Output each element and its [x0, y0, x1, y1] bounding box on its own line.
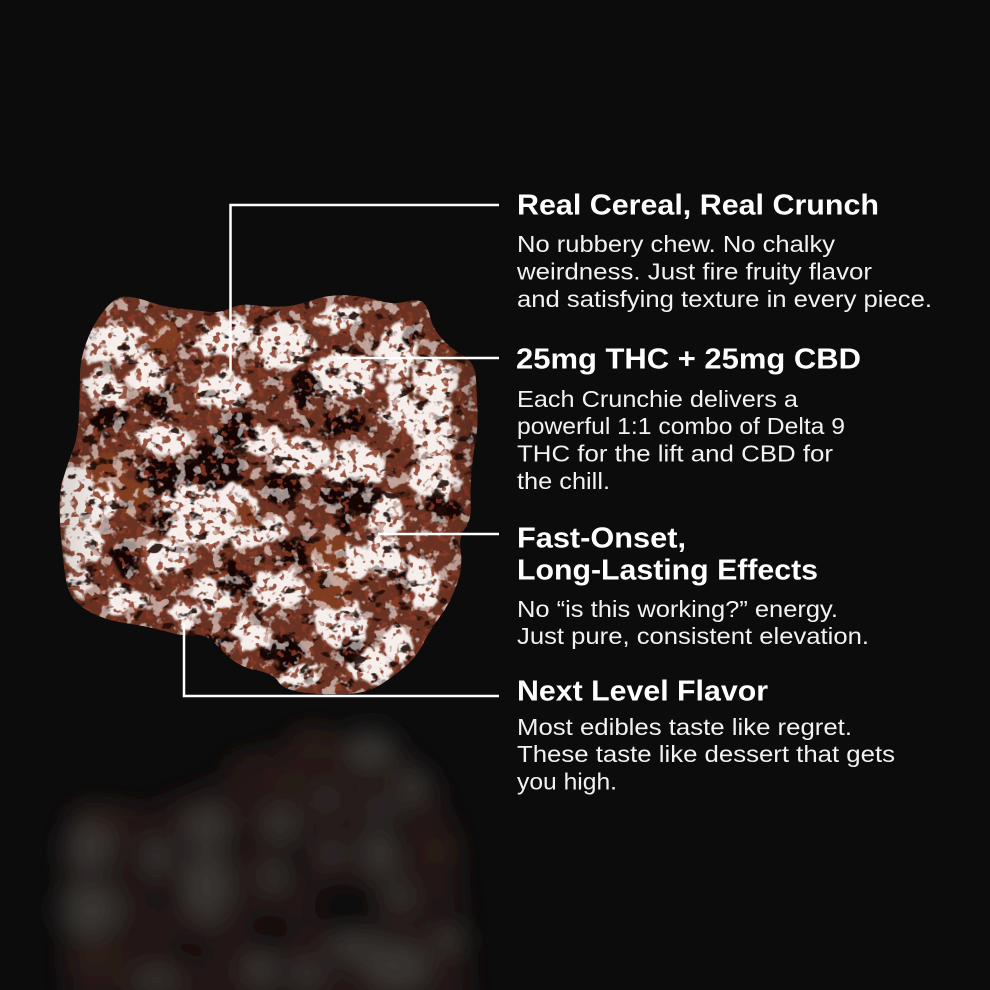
body text: These taste like dessert that gets	[517, 741, 895, 767]
body text: and satisfying texture in every piece.	[517, 286, 932, 312]
callout leader lines	[184, 205, 499, 696]
leader: next level flavor	[184, 623, 499, 696]
body text	[516, 231, 932, 312]
body text: weirdness. Just fire fruity flavor	[516, 258, 872, 284]
cereal texture noise	[50, 285, 490, 705]
leader: thc and cbd	[337, 357, 499, 359]
body text: THC for the lift and CBD for	[517, 440, 833, 466]
heading: Real Cereal, Real Crunch	[517, 190, 879, 222]
body text	[517, 714, 895, 794]
body text: Just pure, consistent elevation.	[517, 623, 869, 649]
body text	[517, 386, 845, 494]
callout: real cereal, real crunch	[516, 190, 932, 312]
body text: you high.	[517, 768, 617, 794]
callout: 25mg thc + 25mg cbd	[516, 344, 861, 494]
blurred reflection of product	[60, 727, 473, 990]
heading	[517, 522, 818, 586]
leader: fast onset	[378, 533, 499, 535]
leader: real cereal	[230, 205, 499, 372]
body text: No rubbery chew. No chalky	[517, 231, 835, 257]
body text: Most edibles taste like regret.	[517, 714, 852, 740]
body text: No “is this working?” energy.	[517, 596, 838, 622]
body text: the chill.	[517, 468, 610, 494]
body text: Each Crunchie delivers a	[517, 386, 799, 412]
heading: Fast-Onset,	[517, 522, 686, 554]
heading: 25mg THC + 25mg CBD	[516, 344, 861, 376]
callout: next level flavor	[517, 676, 895, 794]
callout: fast-onset, long-lasting effects	[517, 522, 869, 649]
heading: Next Level Flavor	[517, 676, 768, 708]
body text: powerful 1:1 combo of Delta 9	[517, 413, 845, 439]
body text	[517, 596, 869, 649]
product: cereal crunchie	[50, 285, 490, 705]
heading: Long-Lasting Effects	[517, 554, 818, 586]
low-frequency light and dark masses	[52, 307, 460, 687]
